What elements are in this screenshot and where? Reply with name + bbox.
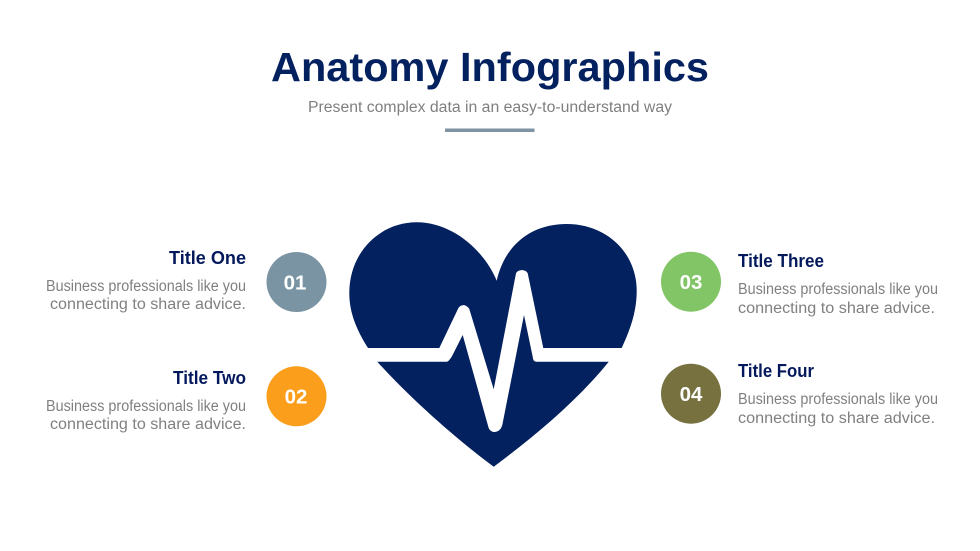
item 04 <box>661 361 938 427</box>
number badge 02 <box>266 366 326 426</box>
title underline <box>445 128 534 132</box>
number badge 04 <box>661 364 721 424</box>
body text: connecting to share advice. <box>738 410 935 427</box>
number badge 03 <box>661 252 721 312</box>
subtitle: Present complex data in an easy-to-understand way <box>308 99 672 116</box>
heading: Title Two: Title Two <box>173 368 246 388</box>
body text <box>46 398 246 433</box>
number badge 01: 01 <box>284 272 306 294</box>
body text: Business professionals like you <box>46 398 246 415</box>
body text: connecting to share advice. <box>738 300 935 317</box>
body text <box>738 281 938 317</box>
body text: connecting to share advice. <box>50 296 246 313</box>
heading: Title Three: Title Three <box>738 251 824 271</box>
heading: Title One: Title One <box>169 248 246 268</box>
body text: Business professionals like you <box>738 391 938 408</box>
item 02 <box>46 366 326 433</box>
number badge 02: 02 <box>285 386 307 408</box>
body text: Business professionals like you <box>738 281 938 298</box>
heading: Title Four: Title Four <box>738 361 814 381</box>
body text: Business professionals like you <box>46 278 246 295</box>
heart with heartbeat line <box>349 222 637 467</box>
icon: heart <box>349 222 637 467</box>
number badge 01 <box>266 252 326 312</box>
body text <box>738 391 938 427</box>
body text: connecting to share advice. <box>50 416 246 433</box>
title: Anatomy Infographics <box>271 44 709 90</box>
item 03 <box>661 251 938 317</box>
number badge 03: 03 <box>680 271 702 294</box>
icon: heartbeat pulse line <box>360 270 630 432</box>
body text <box>46 278 246 313</box>
number badge 04: 04 <box>680 383 703 406</box>
item 01 <box>46 248 326 313</box>
